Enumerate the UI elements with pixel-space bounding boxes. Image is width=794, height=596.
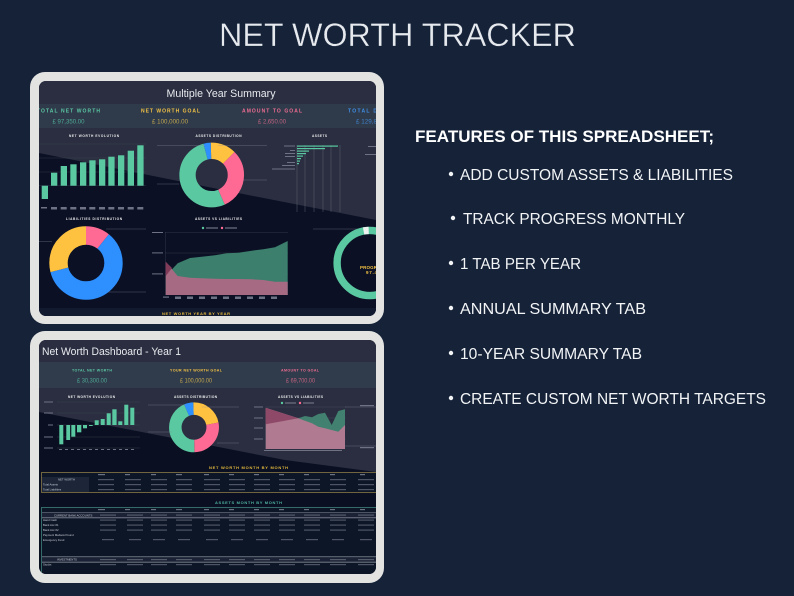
table: net worth month by month: NET WORTH — [58, 478, 75, 482]
table: assets month by month — [42, 500, 382, 578]
table: net worth month by month — [42, 465, 382, 492]
chart: progress ring: 97.4 — [366, 270, 377, 275]
chart: net worth evolution bars — [44, 395, 140, 450]
stat: amount to goal: £ 69,700.00 — [286, 378, 315, 384]
chart: progress ring — [313, 226, 376, 300]
chart: assets vs liabilities area — [254, 395, 376, 451]
table: net worth month by month: Total Liabilities — [43, 488, 62, 492]
chart: assets vs liabilities area: ASSETS VS LIABILITIES — [195, 217, 242, 221]
chart: net worth evolution bars — [39, 134, 146, 210]
tablet: multiple year summary — [30, 72, 402, 324]
table: assets month by month: Bank Acc #2 — [43, 528, 59, 532]
table: net worth month by month: NET WORTH MONTH BY MONTH — [209, 465, 288, 470]
features heading: FEATURES OF THIS SPREADSHEET; — [415, 128, 714, 146]
chart: assets distribution donut — [157, 134, 267, 199]
stat: total net worth: £ 97,350.00 — [52, 118, 85, 126]
stat: your net worth goal: £ 100,000.00 — [180, 378, 212, 384]
feature: 10-year summary: 10-YEAR SUMMARY TAB — [460, 346, 642, 363]
stat: net worth goal: £ 100,000.00 — [152, 118, 188, 126]
stat: total net worth — [72, 369, 112, 384]
screen title: Net Worth Dashboard - Year 1 — [42, 346, 181, 358]
stat: your net worth goal: YOUR NET WORTH GOAL — [170, 368, 223, 372]
chart: assets distribution donut — [148, 395, 239, 446]
stat: amount to goal — [281, 369, 319, 384]
chart: assets vs liabilities area: ASSETS VS LIABILITIES — [278, 395, 323, 399]
feature: custom targets: CREATE CUSTOM NET WORTH TARGETS — [460, 391, 766, 408]
chart: liabilities distribution donut — [39, 217, 146, 292]
table: net worth month by month: Total Assets — [43, 482, 59, 486]
stat: amount to goal: £ 2,650.00 — [258, 118, 286, 126]
stat: amount to goal: AMOUNT TO GOAL — [281, 368, 320, 372]
table: assets month by month: Hand Cash — [43, 518, 57, 522]
stat: total net worth — [37, 108, 100, 126]
stat: total (cropped) — [348, 108, 376, 124]
table: assets month by month: INVESTMENTS — [57, 558, 77, 562]
stat: total net worth: TOTAL NET WORTH — [37, 108, 100, 114]
table: assets month by month: CURRENT BANK ACCOUNTS — [54, 514, 92, 518]
table: assets month by month: Bank Acc #1 — [43, 523, 59, 527]
chart: assets distribution donut: ASSETS DISTRIBUTION — [174, 395, 218, 399]
section heading: net worth year by year: NET WORTH YEAR BY YEAR — [162, 311, 230, 316]
chart: liabilities distribution donut: LIABILITIES DISTRIBUTION — [66, 217, 123, 221]
title: NET WORTH TRACKER — [219, 17, 576, 53]
chart: assets vs liabilities area — [152, 217, 288, 299]
chart: net worth evolution bars: NET WORTH EVOLUTION — [68, 395, 116, 399]
stat: total net worth: TOTAL NET WORTH — [72, 368, 112, 372]
chart: net worth evolution bars: NET WORTH EVOLUTION — [69, 134, 120, 138]
feature: custom assets: ADD CUSTOM ASSETS & LIABILITIES — [460, 167, 733, 184]
chart: assets distribution donut: ASSETS DISTRIBUTION — [196, 134, 242, 138]
tablet: year 1 dashboard — [30, 331, 384, 583]
stat: your net worth goal — [170, 369, 222, 384]
feature: annual summary: ANNUAL SUMMARY TAB — [460, 301, 646, 318]
stat: net worth goal: NET WORTH GOAL — [141, 108, 200, 114]
table: assets month by month: ASSETS MONTH BY MONTH — [215, 500, 282, 505]
stat: total net worth: £ 30,300.00 — [77, 378, 107, 384]
chart: assets horizontal bars: ASSETS — [312, 134, 327, 138]
table: assets month by month: Stocks — [43, 562, 52, 566]
screen title: Multiple Year Summary — [166, 88, 276, 100]
stat: total (cropped): TOTAL D — [348, 108, 377, 114]
stat: net worth goal — [141, 108, 200, 126]
stat: amount to goal — [242, 108, 302, 126]
stat: amount to goal: AMOUNT TO GOAL — [242, 108, 302, 114]
features list — [415, 128, 766, 408]
chart: progress ring: PROGR — [360, 265, 378, 270]
table: assets month by month: Emergency Fund — [43, 538, 65, 542]
feature: tab per year: 1 TAB PER YEAR — [460, 256, 581, 273]
stat: total (cropped): £ 129,8 — [356, 118, 377, 126]
feature: track progress: TRACK PROGRESS MONTHLY — [463, 211, 685, 228]
table: assets month by month: Payment Markets Pound — [43, 533, 74, 537]
chart: assets horizontal bars — [272, 134, 376, 212]
